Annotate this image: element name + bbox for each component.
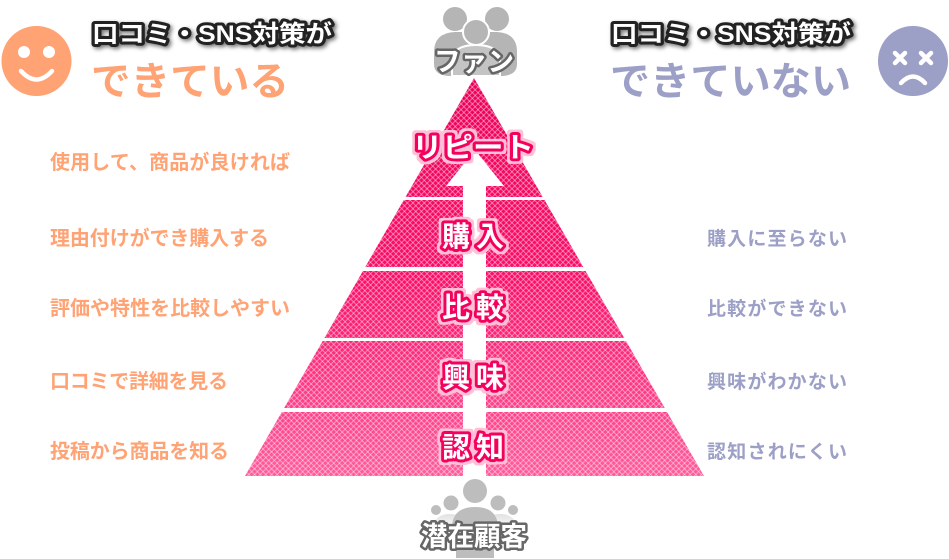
- left column text: 使用して、商品が良ければ: [50, 150, 290, 174]
- tier: repeat: [406, 78, 543, 197]
- icon: potential customers group: [431, 479, 518, 558]
- tier label: interest: 興味: [442, 362, 504, 393]
- heading: left: できている: [91, 61, 289, 104]
- heading: right: できていない: [610, 61, 851, 104]
- left column text: 口コミで詳細を見る: [50, 370, 228, 393]
- icon: fan group: [434, 7, 517, 76]
- heading: right: 口コミ・SNS対策が: [611, 20, 851, 48]
- icon: smiling face: [2, 26, 72, 96]
- tier label: awareness: 認知: [442, 432, 504, 463]
- tier label: repeat: リピート: [412, 132, 534, 163]
- right column text: 購入に至らない: [707, 228, 847, 250]
- left column text: 投稿から商品を知る: [50, 440, 229, 463]
- tier: purchase: [365, 200, 584, 267]
- tier: compare: [324, 271, 624, 338]
- tier label: purchase: 購入: [442, 221, 504, 252]
- heading: right: [610, 20, 851, 104]
- tier label: compare: 比較: [442, 292, 504, 323]
- right column text: 認知されにくい: [707, 441, 847, 463]
- tier: awareness: [240, 412, 710, 476]
- label: fan: ファン: [434, 47, 514, 77]
- left column text: 評価や特性を比較しやすい: [50, 297, 290, 320]
- pyramid: [240, 78, 710, 476]
- left column text: [50, 150, 290, 463]
- tier: interest: [284, 341, 665, 408]
- right column text: 比較ができない: [707, 297, 847, 320]
- left column text: 理由付けができ購入する: [50, 226, 269, 250]
- right column text: [707, 228, 847, 463]
- heading: left: [91, 20, 332, 104]
- right column text: 興味がわかない: [707, 370, 847, 393]
- icon: sad face: [878, 26, 948, 96]
- heading: left: 口コミ・SNS対策が: [92, 20, 332, 48]
- arrow: upward: [446, 150, 504, 476]
- label: potential customers: 潜在顧客: [421, 522, 527, 552]
